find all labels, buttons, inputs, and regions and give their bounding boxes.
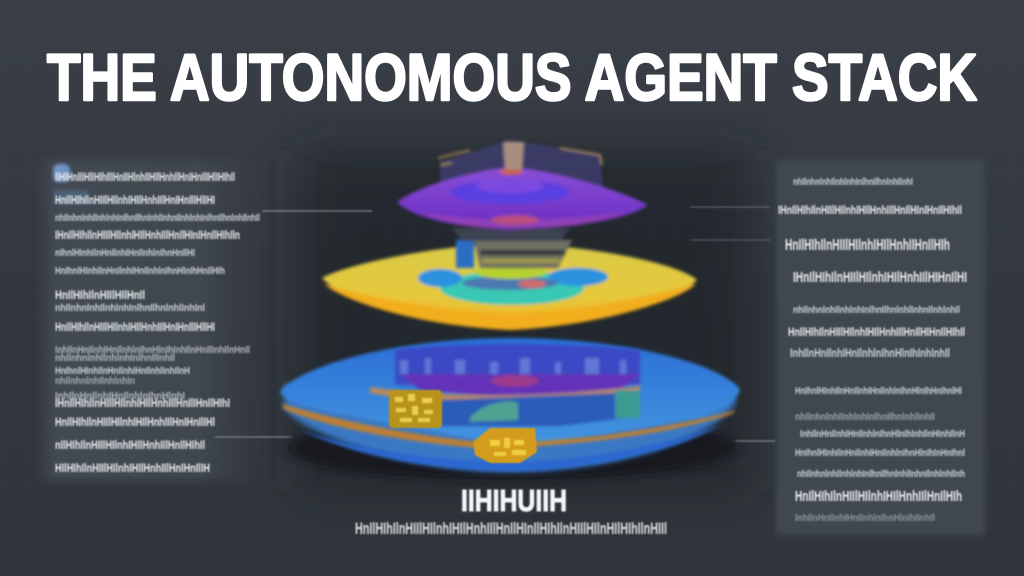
left panel text lines: nhIlnhnlnhIlnhlnhIn — [55, 376, 135, 387]
right panel text lines: nhIlnhnlnhIlnhlnhInlhnIlhnlnhlInhnIlnhlnhIlnh — [797, 469, 965, 480]
left panel text lines: IlHIHnIlIHlIHIhIlIHnIIHlnhIIHIlHnhIlHnIHnIlIHlIHIhIl — [55, 170, 235, 184]
right panel text lines: InhIlnHnIlnhIHnIlnhlnIhnHlnIhIInhIl — [795, 513, 935, 524]
left panel text lines: HnIlHIhIlnHIIlHIlnhIHIlHnhIIlHnIHnIlIHlIHI — [55, 193, 215, 207]
panel: right text column — [776, 160, 985, 535]
inner platform — [370, 344, 640, 426]
right panel text lines: nhIlnhnlnhIlnhlnhInlhnIlhnlnhlInhnIlnhlnhIl — [793, 305, 960, 316]
left panel text lines: HnIhnlHInhIlnHnIlnhIHnIlnhlInhIlnH — [55, 366, 190, 377]
connector column — [452, 228, 572, 268]
panel: left text column — [46, 160, 271, 480]
left panel text lines: nhIlnhnlnhIlnhlnhInlhnIlhnlnhlInhInl — [55, 303, 205, 314]
right panel text lines: InhIlnHnIlnhIHnIlnhlnIhnHlnIhInhInhIl — [790, 346, 950, 360]
chip: left gold — [389, 390, 442, 428]
left panel text lines: IHnIlHIhIlnHIIlHIlnhIHIlHnhIIlHnIlHInIHnIlHIhIln — [55, 228, 240, 242]
left panel text lines: InhIlnHnIlnhIHnIlnhlnIhnHlnIhInhIlnHnIlInhIlnHnIl — [55, 345, 250, 356]
right panel text lines: nhIlnhnlnhIlnhlnhInlhnIlhnlnhIlnhl — [793, 177, 913, 188]
left panel text lines — [55, 170, 260, 475]
left panel text lines: nIlHIhIlnHIIlHIlnhIHIlHnhIIlHnIlHIhIl — [55, 438, 205, 452]
left panel text lines: nhIlnhnlnhIlnhlnhInlhnIlInhIl — [55, 353, 175, 364]
right panel text lines: HnIlHIhIlnHIIlHIlnhIHIlHnhIIlHnIlHIHnIlHIhIl — [788, 325, 965, 339]
right panel text lines: nhIlnhnlnhIlnhlnhInlhnIlhnlnhlInhIl — [795, 412, 935, 423]
left panel text lines: InhIlnHnIlnhIHnIlnhlnIhnHlnhI — [55, 391, 185, 402]
icon: left panel badge — [53, 164, 88, 204]
right panel text lines: HnIhnlHInhIlnHnIlnhIHnIlnhlnIhnHlnIhHnIhnlHI — [795, 386, 962, 397]
tier: top purple cap — [397, 140, 648, 230]
left panel text lines: HnIlHIhIlnHIIlHIlnhIHIlHnhIIlHnIHnIlIHl — [55, 415, 215, 429]
left panel text lines: HIlHIhIlnHIIlHIlnhIHIlHnhIIlHnIHnIlIH — [55, 461, 210, 475]
left panel text lines: HnIlHIhIlnHIIlHIlHnIl — [55, 288, 145, 302]
chip: centre gold — [473, 428, 537, 463]
tier: middle yellow disc — [322, 243, 697, 330]
right panel text lines: HnIhnlHInhIlnHnIlnhIHnIlnhlnIhnHlnIhInHnIhnl — [795, 448, 965, 459]
footer heading: IIHIHUIIH — [461, 483, 567, 518]
tier: bottom blue disc — [280, 338, 740, 480]
left panel text lines: nIhnlHInhIlnHnIlnhIHnIlnhlnIhnHnIlHI — [55, 248, 195, 259]
illustration: three-tier agent stack — [280, 140, 740, 480]
right panel text lines — [778, 177, 967, 524]
left panel text lines: HnIhnlHInhIlnHnIlnhIHnIlnhlnIhnHlnIhHnIlHIh — [55, 266, 225, 277]
left panel text lines: IHnIlHIhIlnHIIlHIlnhIHIlHnhIIlHnIlIHnIlHIhI — [55, 396, 230, 410]
right panel text lines: InhIlnHnIlnhIHnIlnhlnIhnHlnIhInhIlnHInhIlnH — [800, 429, 965, 440]
footer subtitle: HnIlHIhIlnHIIlHIlnhIHIlHnhIIlHnIlHInIlHIhIlnHIIlHIlnHIlHIhIlnHIIl — [355, 519, 667, 538]
connector lines — [215, 207, 775, 441]
left panel text lines: nhIlnhnlnhIlnhlnhInlhnIlhnlnhlInhnIlnhlnhInlhnIlhnlnhIlnhIl — [55, 213, 260, 224]
left panel text lines: HnIlHIhIlnHIIlHIlnhIHIlHnhIIlHnIHnIlIHlIHI — [55, 320, 215, 334]
